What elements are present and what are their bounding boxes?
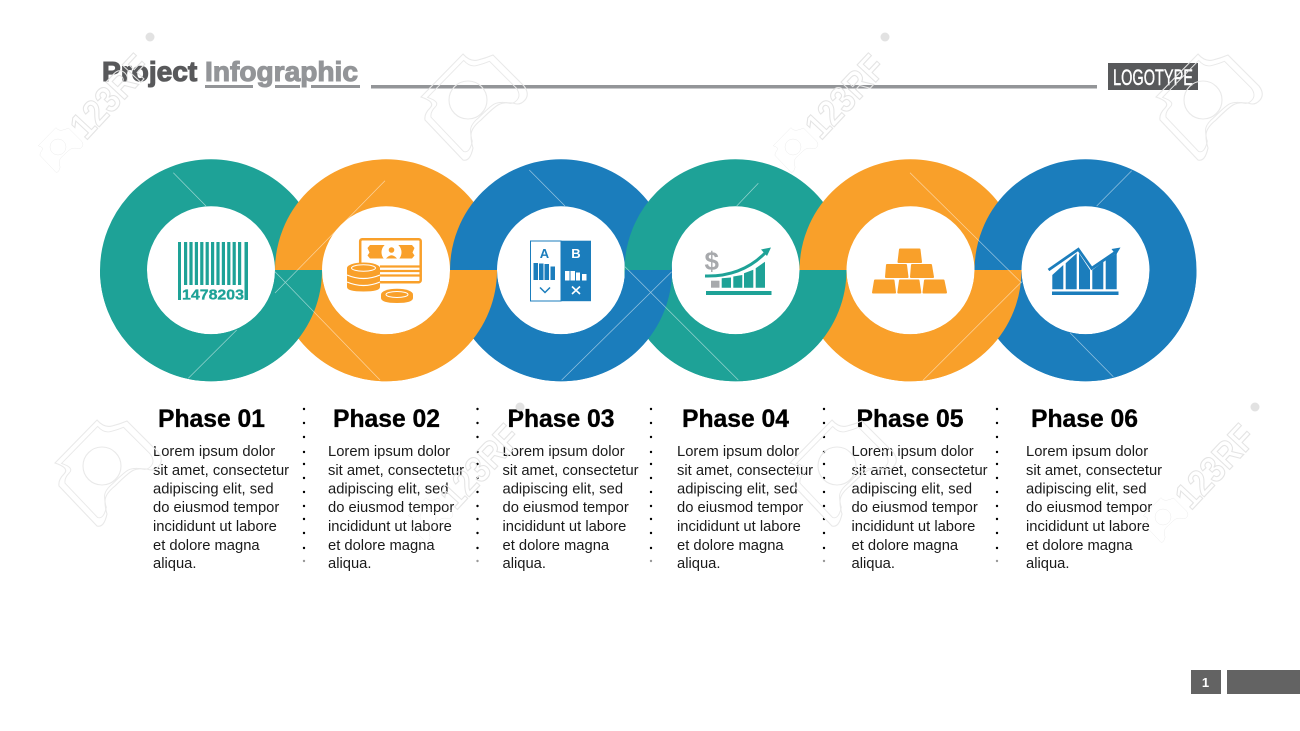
text block: phase 04: aliqua.: [677, 556, 720, 572]
icon: rising chart with dollar: [704, 246, 772, 295]
text block: phase 02: do eiusmod tempor: [328, 500, 454, 516]
icon: A/B comparison: B: [571, 246, 581, 261]
text block: phase 05: incididunt ut labore: [852, 519, 975, 535]
text block: phase 02: [328, 405, 464, 572]
text block: phase 06: sit amet, consectetur: [1026, 463, 1162, 479]
header: title and rule: [102, 56, 1097, 88]
text block: phase 05: adipiscing elit, sed: [852, 482, 972, 498]
text block: phase 05: Phase 05: [856, 405, 964, 433]
text block: phase 06: [1026, 405, 1162, 572]
watermark: wordmark top centre-right: [773, 32, 894, 172]
title: Project Infographic: [102, 56, 358, 87]
text block: phase 06: Phase 06: [1031, 405, 1138, 433]
rings lower layer: [100, 270, 1196, 382]
logotype badge: [1108, 63, 1198, 90]
text block: phase 06: adipiscing elit, sed: [1026, 482, 1147, 498]
text block: phase 04: incididunt ut labore: [677, 519, 801, 535]
text block: phase 01: [153, 405, 289, 572]
text block: phase 03: Phase 03: [508, 405, 614, 433]
text block: phase 05: Lorem ipsum dolor: [852, 444, 974, 460]
text block: phase 03: [502, 405, 639, 572]
text block: phase 02: Phase 02: [333, 405, 440, 433]
icon: A/B comparison: A: [540, 246, 550, 261]
text block: phase 02: sit amet, consectetur: [328, 463, 464, 479]
watermark: wordmark lower centre-left: 123RF: [432, 417, 529, 516]
icon: banknotes and coins: [347, 239, 421, 303]
text block: phase 06: do eiusmod tempor: [1026, 500, 1152, 516]
text block: phase 01: incididunt ut labore: [153, 519, 277, 535]
text block: phase 02: Lorem ipsum dolor: [328, 444, 450, 460]
watermark: wordmark top centre-right: 123RF: [797, 47, 894, 146]
watermark: large stamp lower left: [55, 420, 161, 526]
watermark: wordmark top left: [38, 32, 159, 172]
header rule: [371, 85, 1097, 88]
text block: phase 05: [852, 405, 988, 572]
text block: phase 04: et dolore magna: [677, 538, 784, 554]
text block: phase 04: do eiusmod tempor: [677, 500, 803, 516]
text block: phase 01: aliqua.: [153, 556, 196, 572]
watermark: wordmark lower right: 123RF: [1167, 417, 1264, 516]
text block: phase 05: do eiusmod tempor: [852, 500, 978, 516]
text block: phase 02: aliqua.: [328, 556, 371, 572]
separator dots: [303, 408, 998, 562]
text block: phase 02: et dolore magna: [328, 538, 435, 554]
text block: phase 01: Lorem ipsum dolor: [153, 444, 275, 460]
icon: A/B comparison: [530, 241, 591, 301]
hairline diagonals over rings: [173, 170, 1132, 380]
watermark: wordmark top left: 123RF: [62, 47, 159, 146]
text block: phase 05: aliqua.: [852, 556, 895, 572]
text block: phase 05: sit amet, consectetur: [852, 463, 988, 479]
text block: phase 01: adipiscing elit, sed: [153, 482, 274, 498]
logotype badge: LOGOTYPE: [1113, 65, 1193, 90]
text block: phase 03: et dolore magna: [502, 538, 610, 554]
text block: phase 04: sit amet, consectetur: [677, 463, 813, 479]
text block: phase 06: incididunt ut labore: [1026, 519, 1150, 535]
text block: phase 06: Lorem ipsum dolor: [1026, 444, 1148, 460]
rings upper layer: [124, 183, 1173, 358]
text block: phase 03: aliqua.: [502, 556, 546, 572]
text block: phase 04: adipiscing elit, sed: [677, 482, 798, 498]
text block: phase 03: Lorem ipsum dolor: [502, 444, 625, 460]
text block: phase 06: et dolore magna: [1026, 538, 1133, 554]
text block: phase 03: incididunt ut labore: [502, 519, 626, 535]
text block: phase 03: do eiusmod tempor: [502, 500, 629, 516]
text block: phase 01: et dolore magna: [153, 538, 260, 554]
text block: phase 02: adipiscing elit, sed: [328, 482, 449, 498]
page number: [1191, 670, 1300, 694]
icon: rising chart with dollar: $: [704, 246, 719, 276]
text block: phase 01: sit amet, consectetur: [153, 463, 289, 479]
watermark: large stamp top centre: [421, 54, 527, 160]
text block: phase 04: Phase 04: [682, 405, 789, 433]
watermark: large stamp top right: [1156, 54, 1262, 160]
icon: barcode: [178, 242, 248, 304]
icon: line and bar chart: [1048, 248, 1120, 295]
text block: phase 01: Phase 01: [158, 405, 265, 433]
text block: phase 04: Lorem ipsum dolor: [677, 444, 799, 460]
text block: phase 05: et dolore magna: [852, 538, 959, 554]
text block: phase 02: incididunt ut labore: [328, 519, 452, 535]
watermarks: [38, 32, 1264, 542]
title underline segments: [205, 85, 360, 88]
text block: phase 01: do eiusmod tempor: [153, 500, 279, 516]
text block: phase 03: sit amet, consectetur: [502, 463, 639, 479]
watermark: wordmark lower centre-left: [408, 402, 529, 542]
watermark: wordmark lower right: [1143, 402, 1264, 542]
page number: 1: [1202, 675, 1209, 690]
text block: phase 03: adipiscing elit, sed: [502, 482, 623, 498]
icon: barcode: 1478203: [182, 286, 244, 304]
watermark: large stamp lower centre: [790, 420, 896, 526]
text block: phase 04: [677, 405, 813, 572]
text block: phase 06: aliqua.: [1026, 556, 1069, 572]
interlocking ring chain: [124, 183, 1173, 358]
icon: stacked gold bars: [873, 250, 946, 292]
